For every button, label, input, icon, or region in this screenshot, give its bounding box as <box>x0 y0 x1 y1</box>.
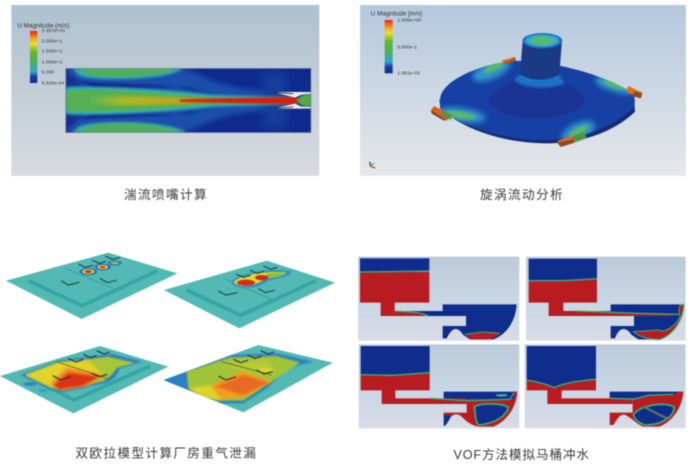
legend: velocity magnitude: 5.000 <box>42 70 54 76</box>
frame 4 <box>525 344 686 428</box>
plate 3: cloud at later time <box>0 346 168 413</box>
legend: velocity magnitude: 5.000e-1 <box>397 44 417 50</box>
plate 4: cloud fully developed <box>163 345 333 412</box>
caption: turbulent nozzle: 湍流喷嘴计算 <box>124 188 208 202</box>
frame 1 <box>358 257 519 341</box>
panel: two-fluid Euler heavy gas leak <box>0 253 335 461</box>
frame 3 <box>359 344 519 428</box>
legend: velocity magnitude: U Magnitude [m/s] <box>371 10 422 17</box>
legend: velocity magnitude <box>17 22 69 86</box>
panel: swirl flow analysis <box>360 5 686 202</box>
legend: velocity magnitude: 2.457e+01 <box>42 28 66 34</box>
legend: velocity magnitude: U Magnitude (m/s) <box>17 22 69 29</box>
panel: turbulent nozzle calculation <box>11 5 319 202</box>
legend: velocity magnitude: 1.006e+00 <box>397 17 421 23</box>
legend: velocity magnitude: 1.891e-03 <box>397 71 420 77</box>
cylinder <box>520 41 562 80</box>
panel background <box>360 5 686 176</box>
legend: velocity magnitude <box>371 10 422 77</box>
legend: velocity magnitude: 1.000e+1 <box>42 59 63 65</box>
disk side wall <box>439 97 635 143</box>
flow field: jet contour <box>66 68 311 133</box>
caption: heavy gas leak: 双欧拉模型计算厂房重气泄漏 <box>75 446 257 461</box>
disk top surface <box>439 60 636 140</box>
plate 2: spreading cloud <box>164 261 335 328</box>
swirl chamber 3D model <box>431 33 642 147</box>
legend: velocity magnitude: 5.525e-04 <box>42 80 64 86</box>
legend: velocity magnitude: 2.000e+1 <box>42 38 63 44</box>
inlet nozzles <box>431 57 642 147</box>
caption: swirl flow: 旋涡流动分析 <box>480 188 564 202</box>
cone <box>488 74 585 118</box>
legend: velocity magnitude: 1.500e+1 <box>42 49 63 55</box>
caption: VOF toilet flush: VOF方法模拟马桶冲水 <box>453 447 590 462</box>
plate 1: early leak <box>6 253 177 319</box>
icon: axis triad <box>370 162 375 168</box>
frame 2 <box>526 257 686 341</box>
panel background <box>11 5 319 176</box>
panel: VOF toilet flushing simulation <box>358 257 686 462</box>
